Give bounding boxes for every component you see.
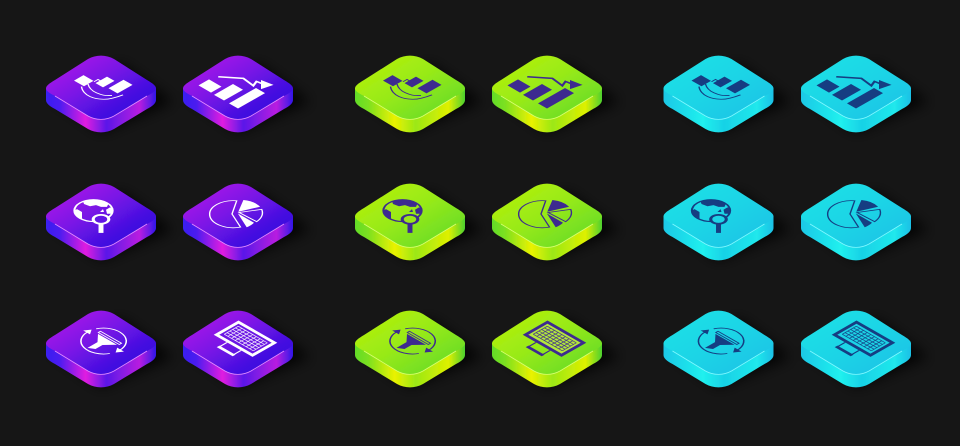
green tile: funnel [355,311,482,387]
icon: globe with magnifier [682,194,749,233]
icon: globe with magnifier [373,194,441,233]
green tile: bar chart with arrow [492,56,619,132]
icon: bars with zigzag arrow [816,64,894,109]
purple tile: globe search [46,184,173,260]
purple tile: pie chart [183,184,310,260]
icon: hand holding bar chart [68,66,136,105]
icon: monitor with data grid [515,322,584,361]
green tile: pie chart [492,184,619,260]
green icon group [355,56,619,387]
cyan tile: funnel [664,311,790,387]
icon: funnel with circular arrows [68,321,139,361]
icon: funnel with circular arrows [686,321,757,361]
icon: bars with zigzag arrow [198,64,276,109]
icon: hand holding bar chart [685,66,754,105]
icon: pie chart [200,193,272,234]
icon: pie chart [509,193,581,234]
purple icon group [46,56,310,387]
icon: monitor with data grid [824,322,892,361]
purple tile: hand with bar chart [46,56,173,132]
icon: monitor with data grid [206,322,274,361]
green tile: monitor [492,311,619,387]
green tile: hand with bar chart [355,56,482,132]
cyan tile: pie chart [801,184,928,260]
icon: pie chart [818,193,890,234]
cyan tile: monitor [801,311,928,387]
cyan tile: bar chart with arrow [801,56,928,132]
icon set canvas [46,56,921,388]
purple tile: monitor [183,311,310,387]
icon: funnel with circular arrows [377,321,448,361]
purple tile: funnel [46,311,173,387]
purple tile: bar chart with arrow [183,56,310,132]
green tile: globe search [355,184,482,260]
cyan tile: hand with bar chart [664,56,790,132]
icon: bars with zigzag arrow [507,64,586,109]
cyan icon group [664,56,928,387]
icon: globe with magnifier [64,194,132,233]
icon: hand holding bar chart [377,66,446,105]
cyan tile: globe search [664,184,790,260]
